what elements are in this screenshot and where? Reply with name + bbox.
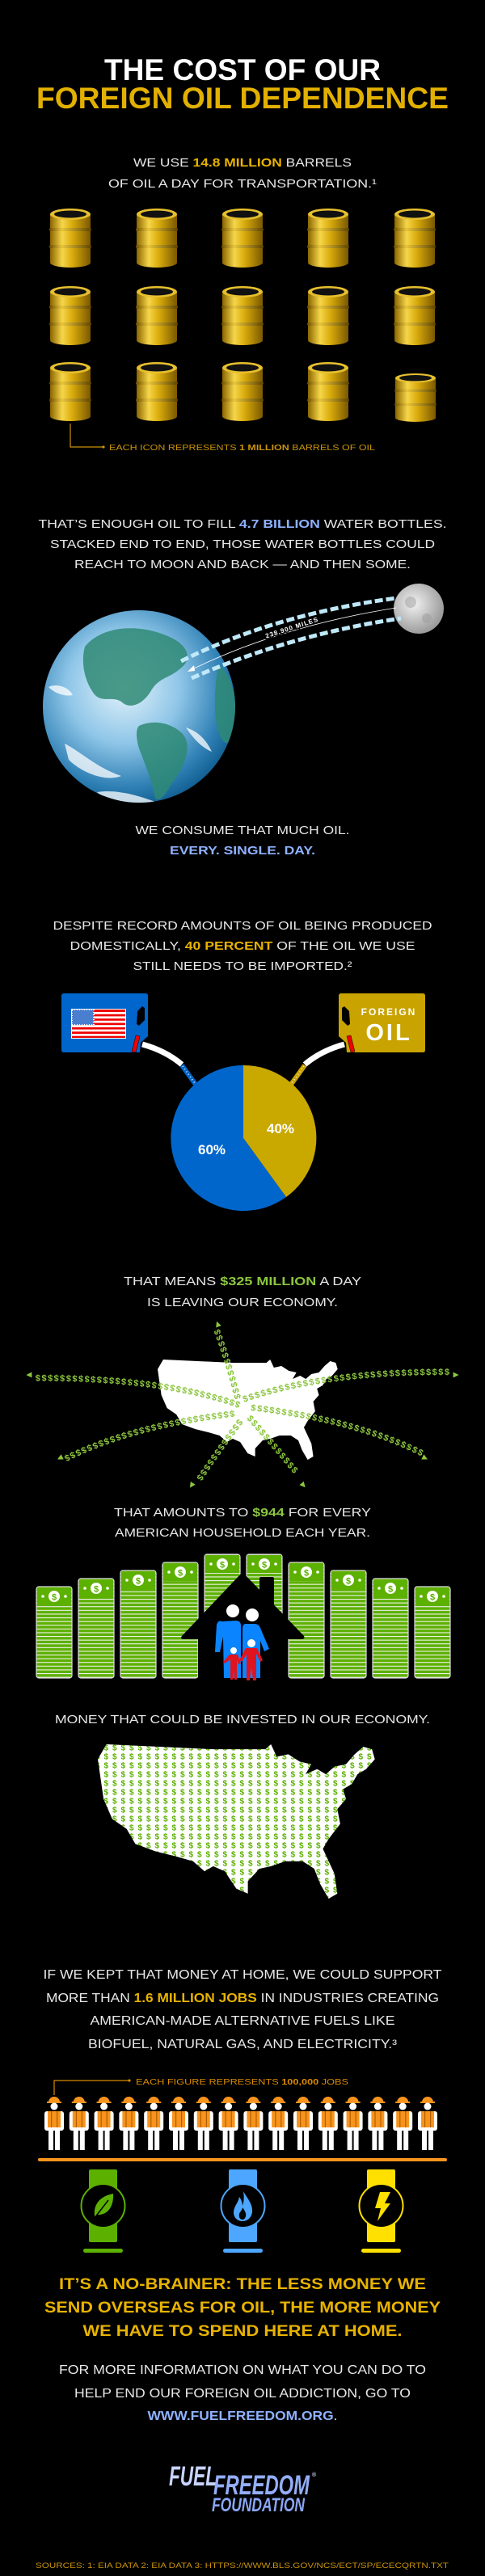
icon: natural gas pump — [221, 2169, 265, 2253]
icon: moon — [394, 584, 444, 634]
icon: foreign oil can: OIL — [365, 1020, 412, 1046]
text: every single day: EVERY. SINGLE. DAY. — [170, 844, 315, 858]
title: THE COST OF OUR — [104, 53, 381, 86]
pie chart: domestic vs imported: 40% — [267, 1121, 294, 1136]
text: 1.6 million jobs — [44, 1968, 442, 2051]
map: US filled with dollars — [98, 1744, 375, 1899]
map: money leaving US: $$$$$$$$$$$$ — [197, 1419, 242, 1481]
money stacks: $ — [304, 1568, 309, 1578]
map: money leaving US: $$$$$$$$$$$$$$$$$$$$$$$$$$$$$$$$$$ — [242, 1368, 449, 1402]
text: 1.6 million jobs: IF WE KEPT THAT MONEY AT HOME, WE COULD SUPPORT — [44, 1968, 442, 1982]
icon: biofuel pump — [81, 2169, 124, 2253]
logo: Fuel Freedom Foundation: ® — [312, 2472, 317, 2478]
text: barrels usage: WE USE 14.8 MILLION BARRELS — [133, 156, 352, 170]
map: money leaving US — [26, 1321, 459, 1487]
text: money could be invested: MONEY THAT COULD BE INVESTED IN OUR ECONOMY. — [55, 1713, 430, 1726]
text: 325 million a day: IS LEAVING OUR ECONOMY. — [147, 1296, 338, 1309]
text: no-brainer conclusion: WE HAVE TO SPEND HERE AT HOME. — [82, 2322, 403, 2340]
text: no-brainer conclusion — [44, 2275, 441, 2340]
text: every single day: WE CONSUME THAT MUCH OIL. — [136, 824, 349, 837]
text: more information: HELP END OUR FOREIGN OIL ADDICTION, GO TO — [74, 2387, 411, 2401]
money stacks — [36, 1554, 450, 1678]
text: 944 per household: AMERICAN HOUSEHOLD EACH YEAR. — [115, 1526, 370, 1540]
icon: foreign oil can: FOREIGN — [361, 1006, 416, 1018]
text: 40 percent imported — [53, 919, 432, 973]
money stacks: $ — [136, 1576, 141, 1586]
text: 325 million a day: THAT MEANS $325 MILLION A DAY — [124, 1275, 361, 1288]
text: 40 percent imported: STILL NEEDS TO BE IMPORTED.² — [133, 959, 352, 973]
text: water bottles: THAT’S ENOUGH OIL TO FILL 4.7 BILLION WATER BOTTLES. — [39, 517, 446, 531]
icon: electricity pump — [359, 2169, 403, 2253]
text: barrels usage: OF OIL A DAY FOR TRANSPORTATION.¹ — [108, 177, 377, 191]
text: no-brainer conclusion: SEND OVERSEAS FOR OIL, THE MORE MONEY — [44, 2299, 441, 2317]
icon: foreign hose — [290, 1044, 344, 1086]
money stacks: $ — [262, 1560, 267, 1570]
barrel legend — [70, 424, 376, 453]
text: 1.6 million jobs: BIOFUEL, NATURAL GAS, AND ELECTRICITY.³ — [88, 2038, 397, 2051]
sources: SOURCES: 1: EIA DATA 2: EIA DATA 3: HTTPS://WWW.BLS.GOV/NCS/ECT/SP/ECECQRTN.TXT — [36, 2561, 449, 2570]
text: water bottles — [39, 517, 446, 571]
logo: Fuel Freedom Foundation: FOUNDATION — [212, 2494, 305, 2516]
text: 325 million a day — [124, 1275, 361, 1309]
icon: domestic fuel can — [61, 993, 148, 1052]
pie chart: domestic vs imported: 60% — [198, 1142, 226, 1157]
pie chart: domestic vs imported — [171, 1065, 316, 1211]
logo: Fuel Freedom Foundation: FUEL — [169, 2461, 217, 2492]
jobs legend: EACH FIGURE REPRESENTS 100,000 JOBS — [136, 2077, 348, 2087]
text: 40 percent imported: DESPITE RECORD AMOUNTS OF OIL BEING PRODUCED — [53, 919, 432, 933]
map: money leaving US: $$$$$$$$$$$$$$$$$$$$$$$$$$$$$ — [65, 1410, 234, 1461]
money stacks: $ — [94, 1584, 99, 1594]
text: 944 per household: THAT AMOUNTS TO $944 FOR EVERY — [114, 1506, 371, 1520]
map: money leaving US: $$$$$$$$$$$$ — [247, 1415, 297, 1473]
money stacks: $ — [52, 1592, 57, 1602]
jobs legend — [54, 2077, 348, 2095]
text: every single day — [136, 824, 349, 858]
text: more information: WWW.FUELFREEDOM.ORG . — [147, 2409, 338, 2423]
logo: Fuel Freedom Foundation — [169, 2461, 317, 2516]
text: barrels usage — [108, 156, 377, 191]
text: 944 per household — [114, 1506, 371, 1540]
text: 1.6 million jobs: AMERICAN-MADE ALTERNATIVE FUELS LIKE — [91, 2014, 394, 2028]
worker figures — [44, 2097, 437, 2150]
money stacks: $ — [178, 1568, 183, 1578]
map: money leaving US: $$$$$$$$$$$$$$$$$$$$$$$$$$$$$$$$$$ — [36, 1374, 241, 1408]
arrow: earth to moon distance — [181, 598, 401, 678]
icon: domestic hose — [142, 1044, 196, 1086]
logo: Fuel Freedom Foundation: FREEDOM — [213, 2470, 310, 2501]
icon: foreign oil can — [339, 993, 425, 1052]
barrel legend: EACH ICON REPRESENTS 1 MILLION BARRELS OF OIL — [109, 444, 376, 453]
text: 40 percent imported: DOMESTICALLY, 40 PERCENT OF THE OIL WE USE — [70, 939, 415, 953]
icon: house with family — [181, 1572, 304, 1680]
money stacks: $ — [220, 1560, 225, 1570]
money stacks: $ — [430, 1592, 435, 1602]
map: money leaving US: $$$$$$$$$$$$ — [213, 1329, 241, 1399]
text: more information: FOR MORE INFORMATION ON WHAT YOU CAN DO TO — [59, 2363, 426, 2377]
barrel grid — [49, 209, 436, 422]
money stacks: $ — [388, 1584, 393, 1594]
text: water bottles: REACH TO MOON AND BACK — AND THEN SOME. — [74, 558, 411, 571]
title: FOREIGN OIL DEPENDENCE — [36, 82, 449, 115]
icon: earth — [43, 610, 236, 810]
text: 1.6 million jobs: MORE THAN 1.6 MILLION JOBS IN INDUSTRIES CREATING — [46, 1992, 439, 2005]
money stacks: $ — [346, 1576, 351, 1586]
title — [36, 53, 449, 115]
text: more information — [59, 2363, 426, 2423]
text: no-brainer conclusion: IT’S A NO-BRAINER: THE LESS MONEY WE — [59, 2275, 426, 2293]
text: water bottles: STACKED END TO END, THOSE WATER BOTTLES COULD — [50, 538, 435, 551]
arrow: earth to moon distance: 238,900 MILES — [264, 616, 319, 640]
map: money leaving US: $$$$$$$$$$$$$$$$$$$$$$$$$$$$$ — [251, 1404, 424, 1457]
